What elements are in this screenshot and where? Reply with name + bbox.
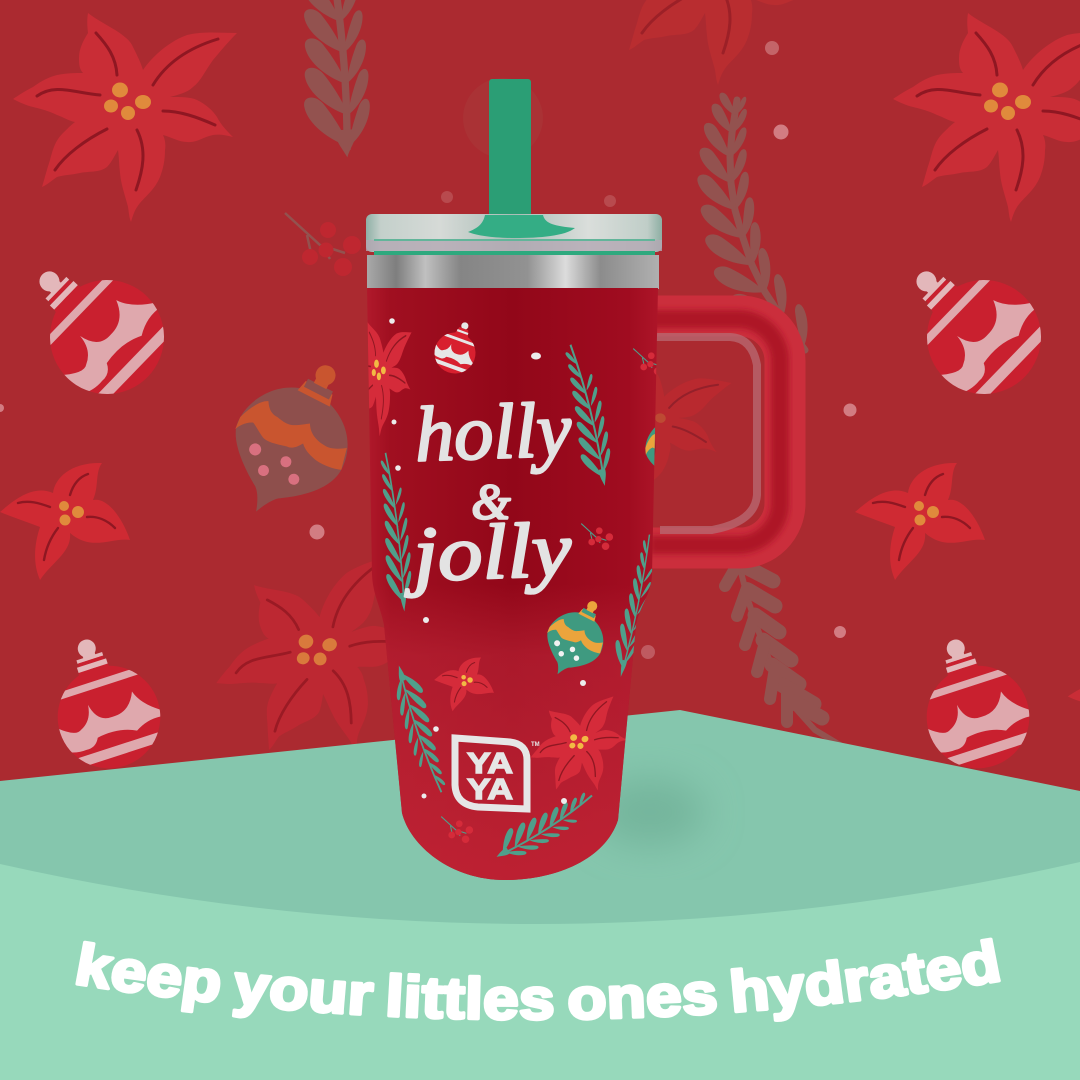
straw xyxy=(489,79,531,219)
handle xyxy=(650,316,785,548)
sprig: below handle xyxy=(725,560,840,745)
text: keep your littles ones hydrated xyxy=(75,938,1001,1022)
YAYA logo: TM xyxy=(531,742,540,748)
steel band xyxy=(367,255,659,289)
body xyxy=(367,288,658,880)
lid xyxy=(366,214,662,255)
YAYA logo xyxy=(455,738,540,809)
holly and jolly lettering xyxy=(401,385,573,598)
background pattern: poinsettias xyxy=(0,0,1080,789)
mug sprigs xyxy=(378,341,664,867)
mug green ornament xyxy=(547,601,604,674)
mug berries xyxy=(441,349,665,843)
foreground arc xyxy=(0,862,1080,1080)
background pattern: berries xyxy=(285,213,361,276)
tumbler xyxy=(344,79,785,880)
floor: mint platform xyxy=(0,710,1080,1080)
background pattern: dots xyxy=(0,41,856,659)
faint ornament behind straw xyxy=(463,78,543,158)
holly and jolly lettering: & xyxy=(472,473,511,529)
holly and jolly lettering: jolly xyxy=(401,505,573,598)
sprig: top centre xyxy=(292,0,373,159)
mug poinsettias xyxy=(344,321,642,808)
floor shadow xyxy=(595,778,705,846)
YAYA logo: YA xyxy=(467,774,513,806)
mug artwork xyxy=(368,318,656,857)
mug partial ornament at edge xyxy=(645,427,656,466)
mug dots xyxy=(389,318,586,804)
body lower shading xyxy=(367,288,658,880)
background pattern: round ornaments xyxy=(0,231,1067,783)
caption xyxy=(65,979,913,1019)
sprig: right of tumbler xyxy=(697,92,821,366)
holly and jolly lettering: holly xyxy=(414,385,573,478)
straw base xyxy=(468,215,575,238)
background pattern: teardrop ornament xyxy=(205,340,381,537)
mug round ornament xyxy=(434,322,476,374)
YAYA logo: YA xyxy=(467,748,513,780)
background pattern: sprigs xyxy=(292,0,840,745)
